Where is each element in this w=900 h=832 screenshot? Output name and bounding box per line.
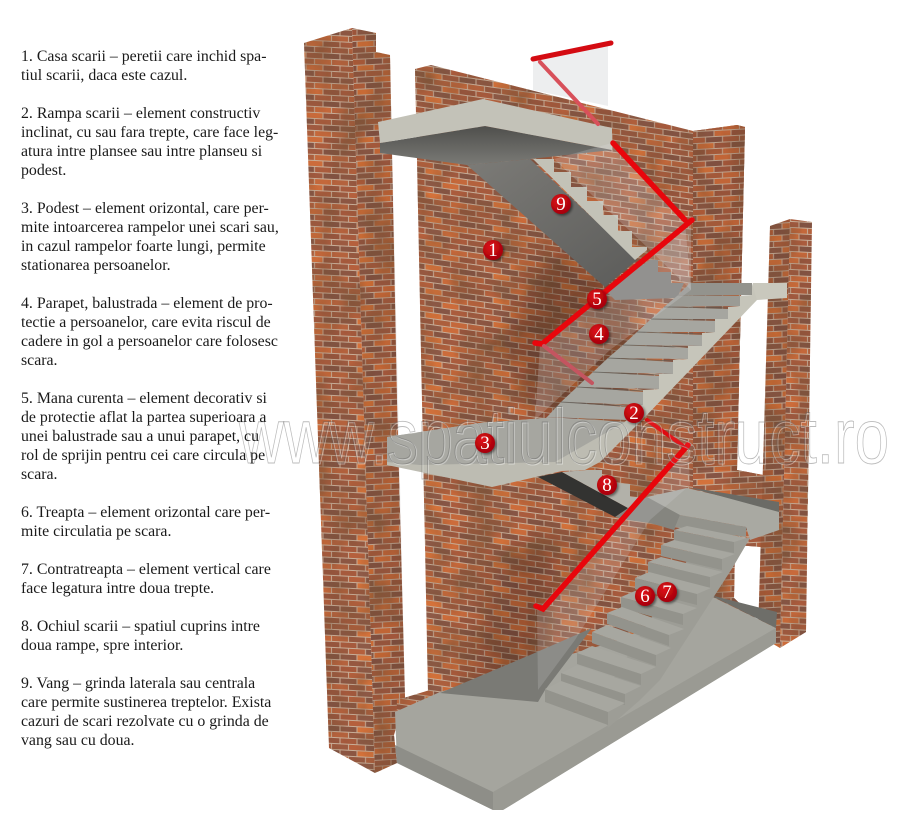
handrail: top [533, 43, 611, 59]
badge 1: 1 [488, 240, 498, 261]
badge 5 [587, 289, 607, 310]
badge 8: 8 [602, 475, 612, 496]
legend text block: 6. Treapta – element orizontal care per- [21, 504, 270, 521]
legend text block: 9. Vang – grinda laterala sau centrala [21, 675, 255, 692]
panel: middle stair flight [530, 283, 787, 433]
handrail: upper flight [613, 143, 685, 220]
legend text block: de protectie aflat la partea superioara a [21, 409, 266, 426]
legend text block: mite intoarcerea rampelor unei scari sau, [21, 219, 279, 236]
panel: middle landing [387, 417, 645, 487]
badge 4 [589, 324, 609, 345]
legend text block: inclinat, cu sau fara trepte, care face leg- [21, 124, 278, 141]
panel: second landing [615, 487, 779, 540]
badge 9 [551, 194, 571, 215]
legend text block: face legatura intre doua trepte. [21, 580, 214, 597]
handrail: top faded [540, 62, 598, 124]
legend text block: podest. [21, 162, 66, 179]
badge 2: 2 [629, 403, 639, 424]
badge 5: 5 [592, 289, 602, 310]
legend text block: vang sau cu doua. [21, 732, 135, 749]
legend text block: 8. Ochiul scarii – spatiul cuprins intre [21, 618, 260, 635]
panel: right brick column [758, 219, 812, 648]
panel: glass balustrades [533, 46, 691, 690]
tread shadows [561, 307, 728, 406]
legend text block: 3. Podest – element orizontal, care per- [21, 200, 269, 217]
badge 7 [657, 582, 677, 603]
badge 8 [597, 475, 617, 496]
legend text block: in cazul rampelor foarte lungi, permite [21, 238, 266, 255]
stringer of lower flight [600, 538, 750, 728]
landing riser [674, 515, 746, 537]
panel: lower stair flight [545, 515, 750, 728]
panel: ramp under middle landing [538, 470, 643, 517]
stepped stringer [533, 159, 647, 260]
badge 9: 9 [556, 194, 566, 215]
legend text block: rol de sprijin pentru cei care circula pe [21, 447, 265, 464]
light stringer [612, 283, 757, 432]
panel: top slab [378, 99, 612, 165]
panel: left brick column [304, 28, 442, 773]
legend text block: doua rampe, spre interior. [21, 637, 183, 654]
steps of lower flight [545, 526, 747, 725]
legend text block: scara. [21, 466, 58, 483]
handrail: middle flight [535, 220, 692, 344]
panel: upper ramp underside [467, 159, 684, 300]
legend text block: unei balustrade sau a unui parapet, cu [21, 428, 259, 445]
badge 4: 4 [594, 324, 604, 345]
legend text block: care permite sustinerea treptelor. Exista [21, 694, 271, 711]
handrail: lower flight [536, 445, 688, 609]
treads [530, 283, 752, 433]
badge 6 [635, 586, 655, 607]
handrail: middle faded [544, 346, 592, 383]
legend text block: cadere in gol a persoanelor care folosesc [21, 333, 278, 350]
badge 7: 7 [662, 582, 672, 603]
legend text block: cazuri de scari rezolvate cu o grinda de [21, 713, 269, 730]
badge 6: 6 [640, 586, 650, 607]
panel: handrails [533, 43, 692, 609]
badge 2 [624, 403, 644, 424]
badge 3: 3 [480, 433, 490, 454]
legend text block: tiul scarii, daca este cazul. [21, 67, 187, 84]
legend text block: 4. Parapet, balustrada – element de pro- [21, 295, 273, 312]
number badges [475, 194, 677, 607]
legend text block: 7. Contratreapta – element vertical care [21, 561, 271, 578]
handrail: landing [647, 420, 682, 445]
legend text block: stationarea persoanelor. [21, 257, 171, 274]
panel: ground slab [395, 595, 777, 810]
legend text block: 2. Rampa scarii – element constructiv [21, 105, 260, 122]
badge 3 [475, 433, 495, 454]
landing strip [752, 283, 787, 300]
panel: back brick wall [415, 65, 778, 705]
legend text block: scara. [21, 352, 58, 369]
legend text block: 1. Casa scarii – peretii care inchid spa- [21, 48, 266, 65]
legend text block: 5. Mana curenta – element decorativ si [21, 390, 267, 407]
legend text block: tectie a persoanelor, care evita riscul de [21, 314, 271, 331]
legend text block [21, 48, 279, 749]
legend text block: mite circulatia pe scara. [21, 523, 171, 540]
badge 1 [483, 240, 503, 261]
legend text block: atura intre plansee sau intre planseu si [21, 143, 262, 160]
